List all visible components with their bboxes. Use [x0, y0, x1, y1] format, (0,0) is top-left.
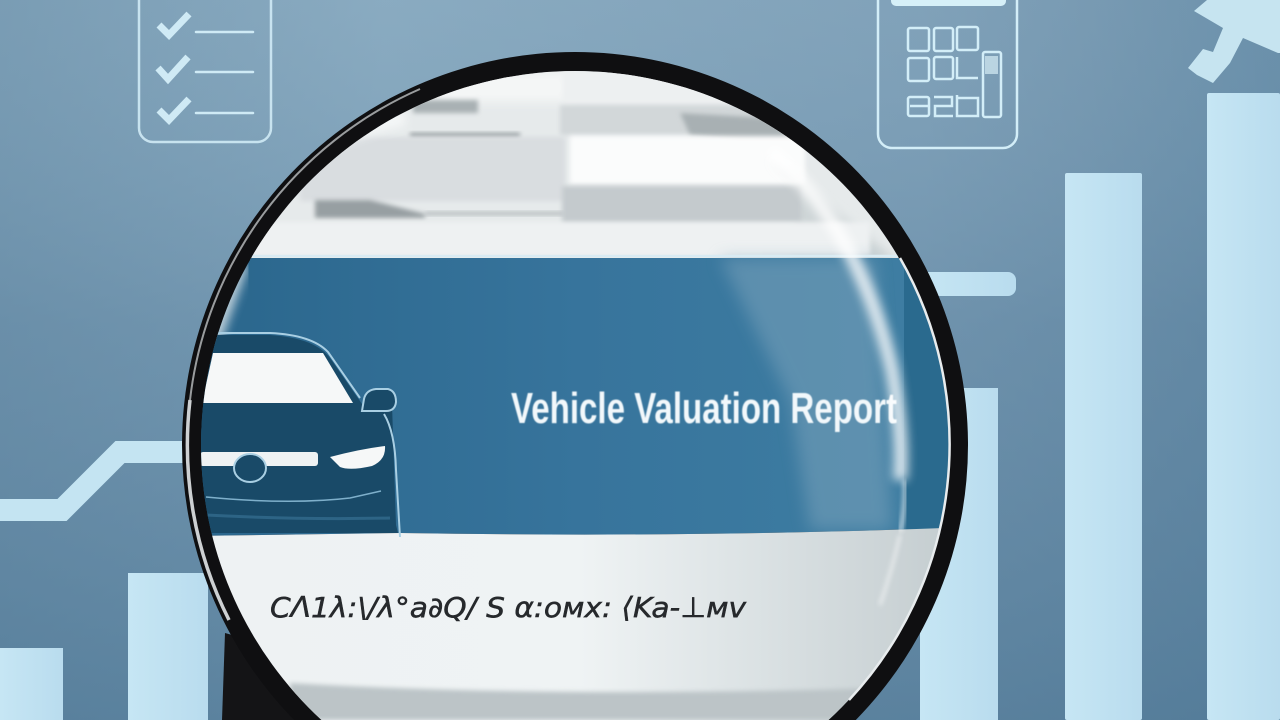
report page lower — [190, 527, 970, 720]
garbled caption: CΛ1λ:\/λ°a∂Q/ S α:oмx: ⟨Ka-⊥мv — [270, 591, 746, 624]
report page top — [250, 71, 900, 260]
magnifier lens — [182, 52, 974, 720]
ring highlights — [187, 89, 950, 700]
trend line — [0, 452, 190, 510]
icon: calculator — [878, 0, 1017, 148]
report title: Vehicle Valuation Report — [511, 384, 897, 433]
magnifier handle — [222, 633, 325, 720]
report header band — [190, 256, 974, 536]
icon: checklist — [139, 0, 271, 142]
glass glare — [792, 178, 916, 604]
horizontal bar — [920, 272, 1016, 296]
arrow — [1188, 0, 1280, 83]
car illustration — [200, 333, 400, 537]
